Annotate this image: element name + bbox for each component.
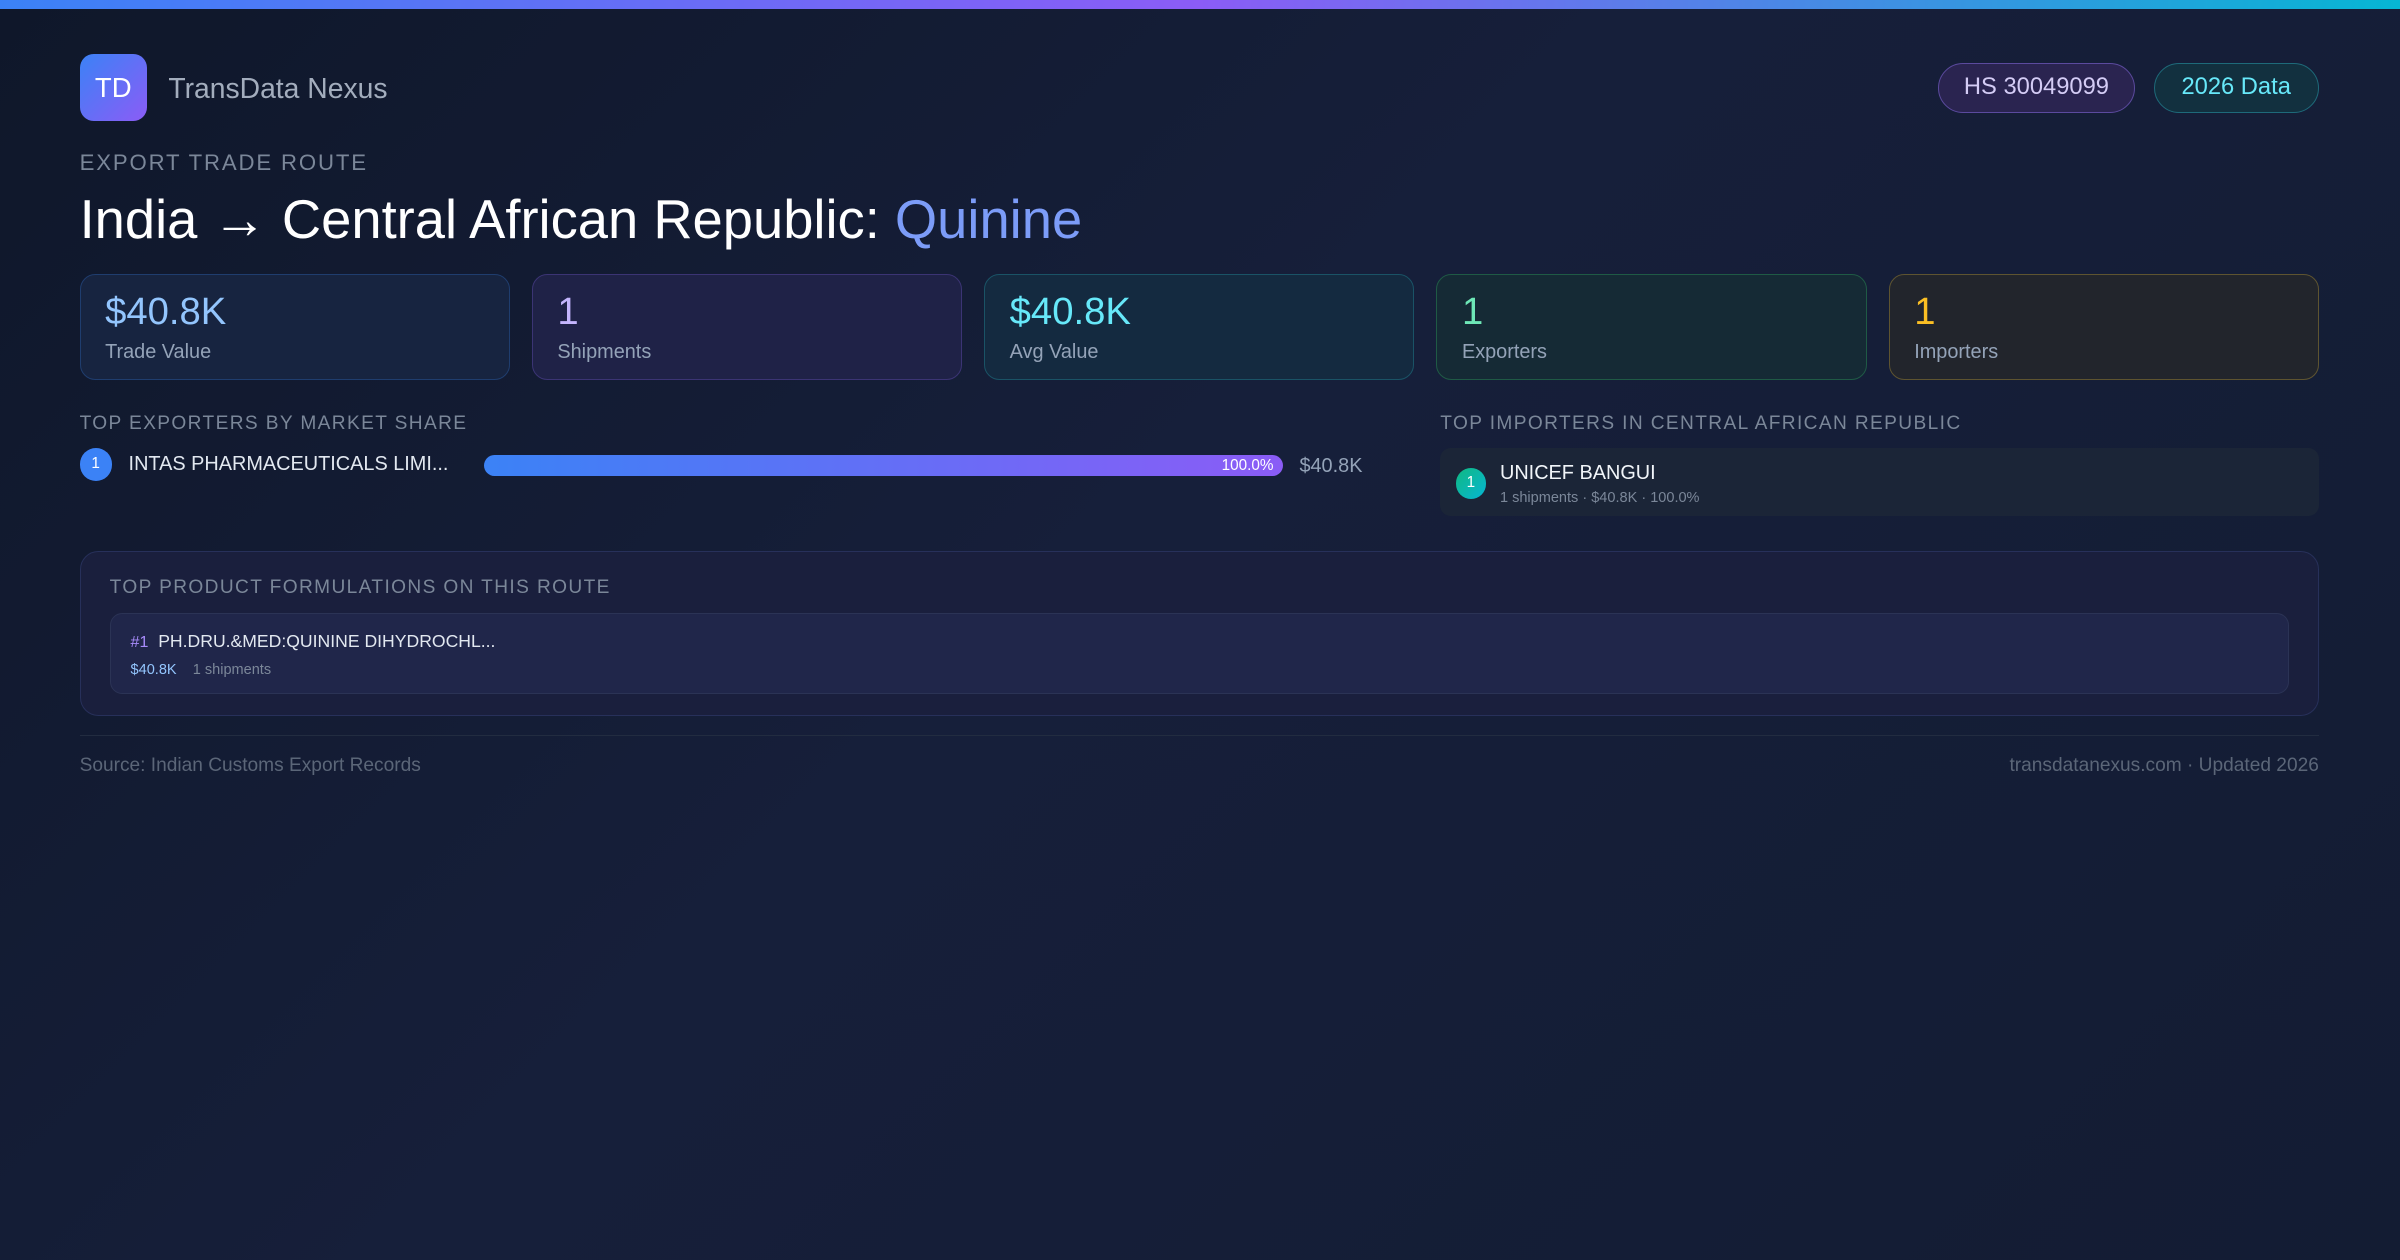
panel heading: TOP PRODUCT FORMULATIONS ON THIS ROUTE [110,576,611,598]
rank badge: 1 [1467,474,1475,491]
rank badge: 1 [91,455,100,472]
stat card: exporters: 1 [1462,290,1483,333]
exporter value: $40.8K [1299,455,1362,477]
heading: exporters: TOP EXPORTERS BY MARKET SHARE [80,413,467,434]
item stats: $40.8K 1 shipments [131,662,271,678]
stat card: trade value [80,274,510,380]
stat card: exporters [1436,274,1867,380]
stat card: shipments [532,274,962,380]
rank badge [1456,468,1486,499]
footer source: Source: Indian Customs Export Records [80,755,421,776]
importer details: 1 shipments · $40.8K · 100.0% [1500,490,1699,506]
pill: HS code [1938,63,2135,113]
stat card: importers: Importers [1914,341,1998,363]
top gradient bar [0,0,2400,9]
stat card: trade value: Trade Value [105,341,211,363]
brand name: TransData Nexus [168,72,387,104]
stat card: trade value: $40.8K [105,290,226,333]
item title: #1 PH.DRU.&MED:QUININE DIHYDROCHL... [131,631,495,651]
stat card: avg value: $40.8K [1010,290,1131,333]
stat card: avg value: Avg Value [1010,341,1098,363]
share bar [484,455,1283,476]
pill: year: 2026 Data [2181,74,2291,100]
stat card: importers: 1 [1914,290,1936,333]
exporter row [80,448,1362,481]
formulation item [110,613,2289,694]
exporter name: INTAS PHARMACEUTICALS LIMI... [129,453,448,475]
title: India → Central African Republic: Quinine [80,189,1082,250]
pill: year [2154,63,2319,113]
heading: importers: TOP IMPORTERS IN CENTRAL AFRICAN REPUBLIC [1440,413,1962,434]
logo: TD [95,72,132,103]
pill: HS code: HS 30049099 [1964,74,2109,100]
stat card: shipments: Shipments [557,341,651,363]
stat card: avg value [984,274,1414,380]
stat card: shipments: 1 [557,290,579,333]
stat card: importers [1889,274,2319,380]
importer name: UNICEF BANGUI [1500,462,1656,484]
eyebrow label: EXPORT TRADE ROUTE [80,150,368,175]
stat card: exporters: Exporters [1462,341,1547,363]
importer card [1440,448,2319,516]
rank badge [80,448,112,481]
share bar: 100.0% [1222,457,1273,474]
logo [80,54,147,121]
panel: product formulations [80,551,2319,716]
footer credit: transdatanexus.com · Updated 2026 [2009,755,2319,776]
